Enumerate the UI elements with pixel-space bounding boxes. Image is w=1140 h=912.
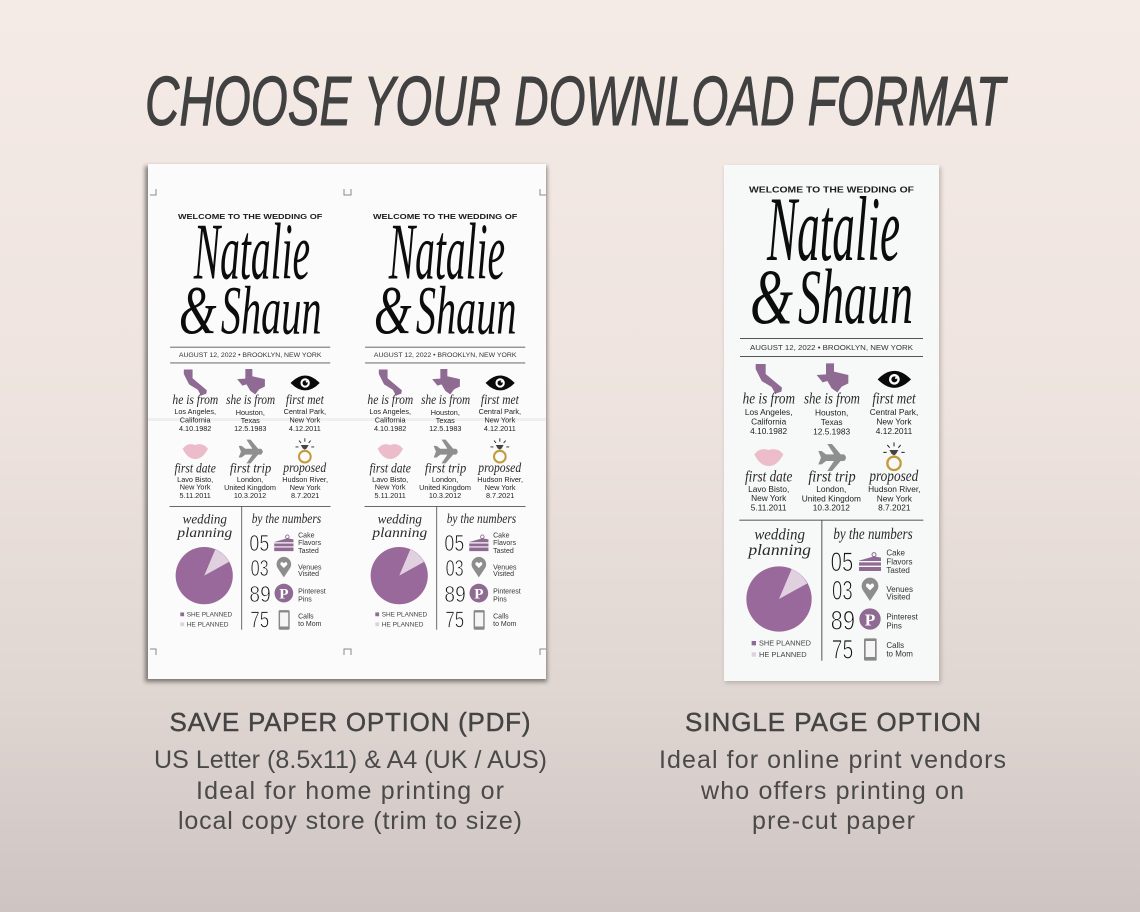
stat: cake flavors: Tasted (886, 566, 910, 575)
fact: he is from: Los Angeles, (369, 407, 411, 416)
pie legend (180, 612, 233, 628)
fact: first trip: London, (237, 475, 263, 484)
fact: first met (870, 390, 918, 436)
fact: proposed: New York (485, 483, 516, 492)
fact: first met: New York (289, 415, 321, 424)
wedding planning heading: planning (371, 525, 428, 540)
icon: plane (434, 440, 458, 463)
fact: he is from (172, 392, 218, 433)
stat: venues visited: Venues (298, 564, 322, 571)
card title block: & (750, 253, 793, 340)
wedding planning heading: planning (176, 525, 233, 540)
stat: cake flavors: 05 (444, 530, 464, 556)
panel: save paper sheet (145, 164, 547, 682)
stat: venues visited: 03 (446, 555, 464, 581)
stat: venues visited (251, 555, 322, 581)
stat: cake flavors: Cake (886, 549, 906, 558)
by the numbers heading: by the numbers (447, 511, 516, 526)
program card: single page copy (739, 178, 923, 664)
stat: calls to mom: to Mom (298, 621, 322, 628)
caption: single page option: SINGLE PAGE OPTION (685, 707, 981, 737)
wedding planning heading (371, 511, 428, 540)
fact: first date: first date (745, 469, 792, 486)
panel: single page sheet (724, 165, 941, 683)
fact: proposed: 8.7.2021 (291, 491, 319, 500)
fact: first met: 4.12.2011 (876, 426, 913, 436)
stat: cake flavors: Tasted (298, 548, 319, 555)
fact: she is from (421, 392, 470, 433)
fact: he is from: he is from (743, 390, 795, 407)
fact: he is from: California (751, 416, 787, 426)
caption: save paper option: US Letter (8.5x11) & A4 (UK / AUS) (154, 746, 547, 774)
fact: first met: 4.12.2011 (484, 424, 516, 433)
icon: eye (291, 376, 320, 390)
pie legend: HE PLANNED (382, 621, 424, 628)
icon: eye (486, 376, 515, 390)
fact: he is from: he is from (367, 392, 413, 407)
fact: first met: New York (484, 415, 516, 424)
fact: she is from: Texas (821, 417, 843, 427)
caption: single page option (659, 707, 1006, 835)
fact: first date: Lavo Bisto, (748, 484, 789, 494)
fact: proposed: New York (290, 483, 321, 492)
stat: cake flavors: Flavors (886, 557, 913, 566)
fact: first date: New York (180, 483, 211, 492)
stat: calls to mom: Calls (298, 614, 314, 621)
fact: she is from (804, 390, 860, 436)
stat: calls to mom (445, 607, 517, 633)
stat: cake flavors: 05 (249, 530, 269, 556)
fact: she is from: Houston, (236, 408, 265, 417)
stat: venues visited: 03 (251, 555, 269, 581)
icon: eye (878, 371, 911, 388)
stat: cake flavors: Cake (493, 533, 510, 540)
fact: she is from: she is from (226, 392, 275, 407)
fact: he is from: Los Angeles, (745, 407, 793, 417)
icon: california (756, 364, 782, 394)
stat: pinterest pins: 89 (831, 605, 855, 635)
wedding planning heading: wedding (754, 526, 805, 543)
card title block: & (179, 273, 216, 349)
fact: she is from: she is from (804, 390, 860, 407)
stat: pinterest pins: P (279, 586, 288, 603)
stat: calls to mom (250, 607, 322, 633)
icon: california (184, 370, 207, 396)
fact: first date: Lavo Bisto, (177, 475, 213, 484)
fact: first date: first date (369, 461, 411, 476)
icon: texas (817, 363, 848, 392)
icon: ring (883, 442, 905, 470)
fact: first trip: London, (432, 475, 458, 484)
pie legend: HE PLANNED (759, 650, 807, 659)
icon: lips (754, 449, 783, 466)
stat: calls to mom: 75 (832, 634, 853, 664)
fact: she is from: Texas (241, 416, 260, 425)
stat: pinterest pins: Pinterest (493, 588, 521, 595)
fact: first trip: first trip (808, 469, 856, 486)
caption: save paper option: SAVE PAPER OPTION (PDF) (170, 707, 530, 737)
fact: proposed (282, 460, 328, 500)
card title block: Natalie (193, 207, 310, 296)
fact: he is from (743, 390, 795, 436)
stat: pinterest pins: 89 (249, 581, 271, 607)
crop marks (150, 189, 546, 655)
icon: lips (378, 444, 403, 459)
pie legend: SHE PLANNED (382, 612, 428, 619)
fact: he is from: 4.10.1982 (750, 426, 788, 436)
caption: save paper option: Ideal for home printing or (196, 777, 504, 805)
wedding planning heading (747, 526, 811, 559)
fact: first trip (419, 461, 471, 500)
icon: texas (237, 369, 265, 394)
fact: first met: first met (872, 390, 916, 407)
by the numbers heading: by the numbers (252, 511, 321, 526)
card title block: Natalie (388, 207, 505, 296)
fact: proposed: New York (877, 493, 913, 503)
stat: venues visited: Visited (493, 571, 514, 578)
stat: cake flavors (831, 547, 913, 577)
fact: first date: New York (375, 483, 406, 492)
fact: she is from: Houston, (431, 408, 460, 417)
stat: calls to mom: Calls (493, 614, 509, 621)
fact: first trip: first trip (230, 461, 272, 476)
icon: lips (183, 444, 208, 459)
stat: venues visited: 03 (832, 575, 853, 605)
fact: first trip (224, 461, 276, 500)
card title block: & (374, 273, 411, 349)
icon: plane (239, 440, 263, 463)
fact: first met: Central Park, (284, 407, 326, 416)
stat: venues visited: Visited (298, 571, 319, 578)
stat: venues visited (832, 575, 913, 605)
card title block: AUGUST 12, 2022 • BROOKLYN, NEW YORK (374, 352, 517, 359)
caption: single page option: who offers printing on (700, 777, 964, 805)
stat: cake flavors (249, 530, 322, 556)
fact: he is from: 4.10.1982 (179, 424, 211, 433)
fact: proposed (477, 460, 523, 500)
fact: first date: New York (751, 493, 787, 503)
pie chart (371, 547, 428, 604)
wedding planning heading: planning (747, 542, 811, 559)
card title block: AUGUST 12, 2022 • BROOKLYN, NEW YORK (750, 343, 913, 352)
card title block: Shaun (416, 273, 516, 349)
fact: first trip: 10.3.2012 (813, 503, 850, 513)
facts grid (743, 363, 920, 513)
fact: first met (284, 392, 326, 433)
fact: he is from: California (375, 415, 406, 424)
stat: pinterest pins: P (474, 586, 483, 603)
fact: first trip (802, 469, 861, 513)
card title block: Shaun (798, 253, 913, 340)
stat: cake flavors: 05 (831, 547, 853, 577)
stat: cake flavors: Tasted (493, 548, 514, 555)
fact: first date: 5.11.2011 (180, 491, 211, 500)
fact: he is from: Los Angeles, (174, 407, 216, 416)
fact: proposed: Hudson River, (477, 475, 523, 484)
card title block: Natalie (767, 178, 900, 280)
fact: he is from: California (180, 415, 211, 424)
bottom section (170, 506, 331, 633)
fact: she is from (226, 392, 275, 433)
stat: cake flavors: Cake (298, 533, 315, 540)
caption: single page option: pre-cut paper (752, 807, 915, 835)
fact: he is from (367, 392, 413, 433)
fact: first date: Lavo Bisto, (372, 475, 408, 484)
card title block: Shaun (221, 273, 321, 349)
card title block (365, 207, 525, 363)
fact: first date (369, 461, 411, 500)
fact: first met: Central Park, (870, 407, 918, 417)
stat: calls to mom: to Mom (493, 621, 517, 628)
fact: first met (479, 392, 521, 433)
bottom section (365, 506, 526, 633)
fact: first trip: United Kingdom (224, 483, 276, 492)
stat: pinterest pins: Pinterest (298, 588, 326, 595)
fact: proposed: proposed (282, 460, 326, 475)
card title block (740, 178, 923, 357)
fact: first met: first met (481, 392, 519, 407)
caption: save paper option: local copy store (trim to size) (178, 807, 522, 835)
icon: plane (818, 444, 846, 471)
fact: she is from: 12.5.1983 (429, 424, 461, 433)
caption: save paper option (154, 707, 547, 835)
icon: california (379, 370, 402, 396)
fact: she is from: 12.5.1983 (234, 424, 266, 433)
stat: calls to mom (832, 634, 913, 664)
wedding planning heading (176, 511, 233, 540)
caption: single page option: Ideal for online print vendors (659, 746, 1006, 774)
pie chart (176, 547, 233, 604)
wedding planning heading: wedding (183, 511, 227, 526)
by the numbers heading: by the numbers (833, 526, 913, 543)
stat: calls to mom: 75 (445, 607, 464, 633)
fact: first date: 5.11.2011 (751, 503, 787, 513)
stat: pinterest pins: Pinterest (886, 612, 919, 621)
facts grid (367, 369, 523, 500)
fact: first trip: United Kingdom (802, 493, 861, 503)
icon: ring (491, 438, 509, 462)
pie legend (375, 612, 428, 628)
card title block (170, 207, 330, 363)
wedding planning heading: wedding (378, 511, 422, 526)
stat: pinterest pins: Pins (298, 596, 312, 603)
fact: first date: 5.11.2011 (375, 491, 406, 500)
stat: cake flavors (444, 530, 517, 556)
fact: proposed: proposed (868, 468, 919, 485)
fact: proposed: 8.7.2021 (486, 491, 514, 500)
pie legend (752, 639, 811, 659)
stat: pinterest pins (444, 581, 521, 607)
pie legend: SHE PLANNED (759, 639, 811, 648)
stat: pinterest pins: 89 (444, 581, 466, 607)
program card: middle copy (365, 207, 526, 633)
pie legend: SHE PLANNED (187, 612, 233, 619)
fact: proposed: proposed (477, 460, 521, 475)
pie legend: HE PLANNED (187, 621, 229, 628)
fact: proposed (868, 468, 920, 513)
stat: venues visited: Visited (886, 593, 910, 602)
fact: he is from: he is from (172, 392, 218, 407)
stat: venues visited (446, 555, 517, 581)
fact: proposed: Hudson River, (282, 475, 328, 484)
stat: cake flavors: Flavors (298, 540, 322, 547)
fact: first date (745, 469, 792, 513)
fact: she is from: she is from (421, 392, 470, 407)
stat: cake flavors: Flavors (493, 540, 517, 547)
stat: calls to mom: Calls (886, 641, 904, 650)
stat: calls to mom: to Mom (886, 650, 913, 659)
fact: he is from: 4.10.1982 (374, 424, 406, 433)
fact: first trip: 10.3.2012 (234, 491, 266, 500)
stat: pinterest pins (831, 605, 919, 635)
fact: first met: New York (876, 416, 912, 426)
icon: texas (432, 369, 460, 394)
stat: pinterest pins (249, 581, 326, 607)
fact: she is from: Texas (436, 416, 455, 425)
stat: pinterest pins: Pins (493, 596, 507, 603)
fact: first date (174, 461, 216, 500)
card title block: AUGUST 12, 2022 • BROOKLYN, NEW YORK (179, 352, 322, 359)
card title block: WELCOME TO THE WEDDING OF (373, 212, 518, 221)
card title block: WELCOME TO THE WEDDING OF (749, 184, 914, 194)
fact: first met: first met (286, 392, 324, 407)
card title block: WELCOME TO THE WEDDING OF (178, 212, 323, 221)
fact: first date: first date (174, 461, 216, 476)
fact: she is from: 12.5.1983 (813, 426, 851, 436)
stat: pinterest pins: P (865, 610, 876, 629)
fact: first met: Central Park, (479, 407, 521, 416)
stat: calls to mom: 75 (250, 607, 269, 633)
facts grid (172, 369, 328, 500)
stat: venues visited: Venues (886, 585, 913, 594)
pie chart (746, 566, 812, 632)
fact: proposed: 8.7.2021 (878, 503, 911, 513)
fact: first trip: London, (816, 484, 846, 494)
fact: proposed: Hudson River, (868, 484, 920, 494)
stat: venues visited: Venues (493, 564, 517, 571)
fact: first met: 4.12.2011 (289, 424, 321, 433)
program card: left copy (170, 207, 331, 633)
bottom section (739, 520, 923, 664)
icon: ring (296, 438, 314, 462)
stat: pinterest pins: Pins (886, 621, 902, 630)
fact: first trip: United Kingdom (419, 483, 471, 492)
fact: she is from: Houston, (815, 408, 848, 418)
fact: first trip: 10.3.2012 (429, 491, 461, 500)
fact: first trip: first trip (425, 461, 467, 476)
